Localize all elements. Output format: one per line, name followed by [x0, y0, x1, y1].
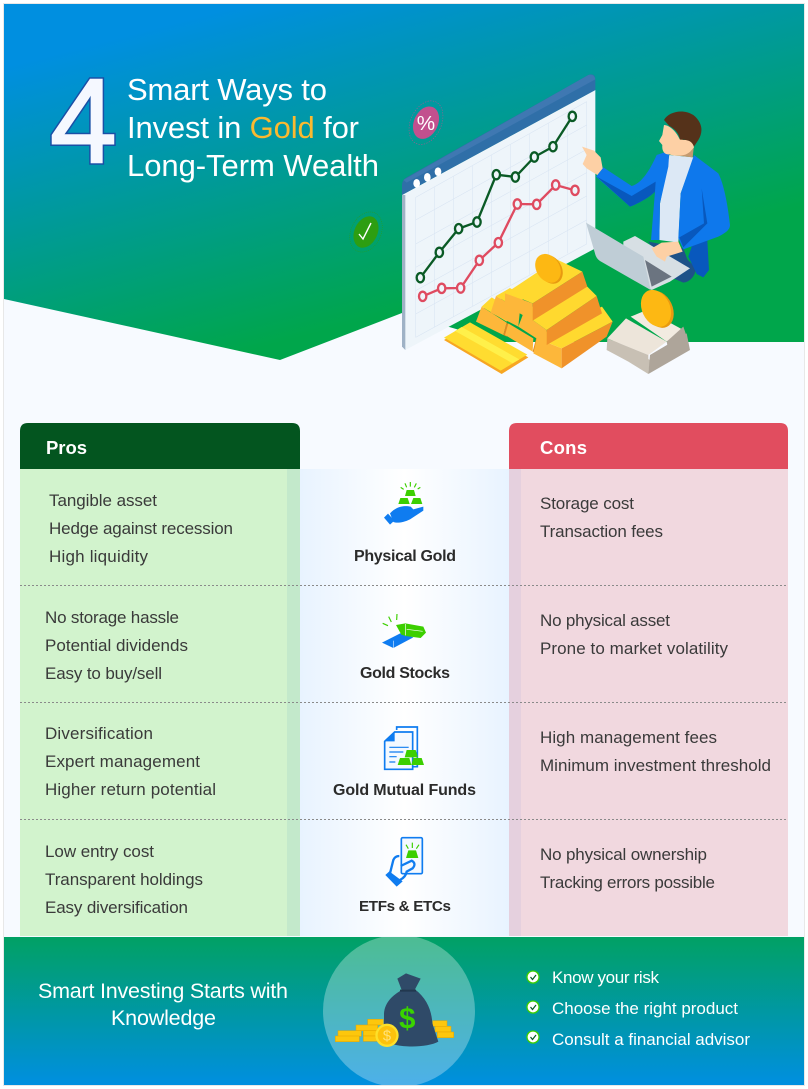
panel: footer: [4, 935, 804, 1087]
cons: etfs and etcs: Tracking errors possible: [540, 873, 715, 892]
icon: money bag: $: [399, 1003, 415, 1036]
pros: etfs and etcs: Low entry cost: [45, 842, 154, 861]
title line 2: Invest in Gold for: [127, 110, 359, 145]
gold coin on silver: [635, 285, 680, 333]
silver bars: [607, 285, 690, 374]
center column background: [300, 469, 509, 936]
gold bars: [444, 249, 613, 374]
footer heading: Smart Investing Starts with: [38, 979, 288, 1003]
cons column body: [509, 469, 788, 936]
pros: gold mutual funds: [45, 724, 216, 799]
icon: mutual fund documents: [385, 727, 424, 769]
icon: money bag: $: [383, 1029, 391, 1045]
cons: physical gold: Transaction fees: [540, 522, 663, 541]
pros: etfs and etcs: Transparent holdings: [45, 870, 203, 889]
person: [582, 111, 730, 283]
pros: etfs and etcs: Easy diversification: [45, 898, 188, 917]
hero illustration: [402, 74, 730, 374]
pros: gold mutual funds: Diversification: [45, 724, 153, 743]
icon: percent badge: %: [417, 112, 435, 135]
pros: gold stocks: [45, 608, 188, 683]
label: physical gold: Physical Gold: [354, 548, 456, 565]
panel: pros: [20, 423, 300, 936]
pros: physical gold: [49, 491, 233, 566]
cons: gold stocks: Prone to market volatility: [540, 639, 728, 658]
icon: percent badge: [402, 95, 450, 150]
pros: gold stocks: No storage hassle: [45, 608, 179, 627]
pros: gold mutual funds: Expert management: [45, 752, 200, 771]
pros: gold stocks: Potential dividends: [45, 636, 188, 655]
pros: physical gold: High liquidity: [49, 547, 148, 566]
footer heading: Knowledge: [111, 1006, 216, 1030]
list item: know your risk: Know your risk: [552, 968, 660, 987]
footer heading: [38, 979, 288, 1030]
checklist: [527, 968, 750, 1049]
cons: gold stocks: [540, 611, 728, 658]
cons: physical gold: [540, 494, 663, 541]
icon: hand holding phone: [385, 838, 422, 887]
gold coin on bars: [530, 249, 568, 289]
icon: hand holding gold: [384, 482, 423, 525]
label: gold stocks: Gold Stocks: [360, 665, 450, 682]
panel: investment types: [300, 469, 509, 936]
cons heading: [509, 423, 788, 469]
numeral 4: 4: [50, 54, 117, 188]
list item: consult a financial advisor: Consult a financial advisor: [552, 1030, 750, 1049]
label: etfs and etcs: ETFs & ETCs: [359, 898, 451, 915]
cons: etfs and etcs: [540, 845, 715, 892]
title line 1: Smart Ways to: [127, 72, 327, 107]
cons: physical gold: Storage cost: [540, 494, 634, 513]
pros: etfs and etcs: [45, 842, 203, 917]
cons: gold mutual funds: [540, 728, 771, 775]
title: [50, 54, 379, 188]
red line series: [419, 180, 579, 301]
pros: physical gold: Tangible asset: [49, 491, 157, 510]
chart window: [402, 74, 595, 350]
pros heading: [20, 423, 300, 469]
icon: money bag: [323, 935, 475, 1087]
pros: gold stocks: Easy to buy/sell: [45, 664, 162, 683]
laptop: [586, 223, 690, 290]
numeral 4: 4: [50, 54, 117, 188]
label: gold mutual funds: Gold Mutual Funds: [333, 782, 476, 799]
footer background: [4, 937, 804, 1085]
green line series: [417, 112, 576, 282]
pros heading: Pros: [46, 437, 87, 458]
header gradient banner: [4, 4, 804, 360]
panel: cons: [509, 423, 788, 936]
cons heading: Cons: [540, 437, 587, 458]
title line 3: Long-Term Wealth: [127, 148, 379, 183]
pros column body: [20, 469, 300, 936]
cons: gold stocks: No physical asset: [540, 611, 670, 630]
cons: etfs and etcs: No physical ownership: [540, 845, 707, 864]
pros: gold mutual funds: Higher return potential: [45, 780, 216, 799]
pros: physical gold: Hedge against recession: [49, 519, 233, 538]
icon: check badge: [344, 207, 388, 257]
list item: choose the right product: Choose the right product: [552, 999, 738, 1018]
icon: gold bars stock: [382, 614, 426, 648]
cons: gold mutual funds: Minimum investment threshold: [540, 756, 771, 775]
cons: gold mutual funds: High management fees: [540, 728, 717, 747]
flat gold bar: [444, 322, 528, 374]
